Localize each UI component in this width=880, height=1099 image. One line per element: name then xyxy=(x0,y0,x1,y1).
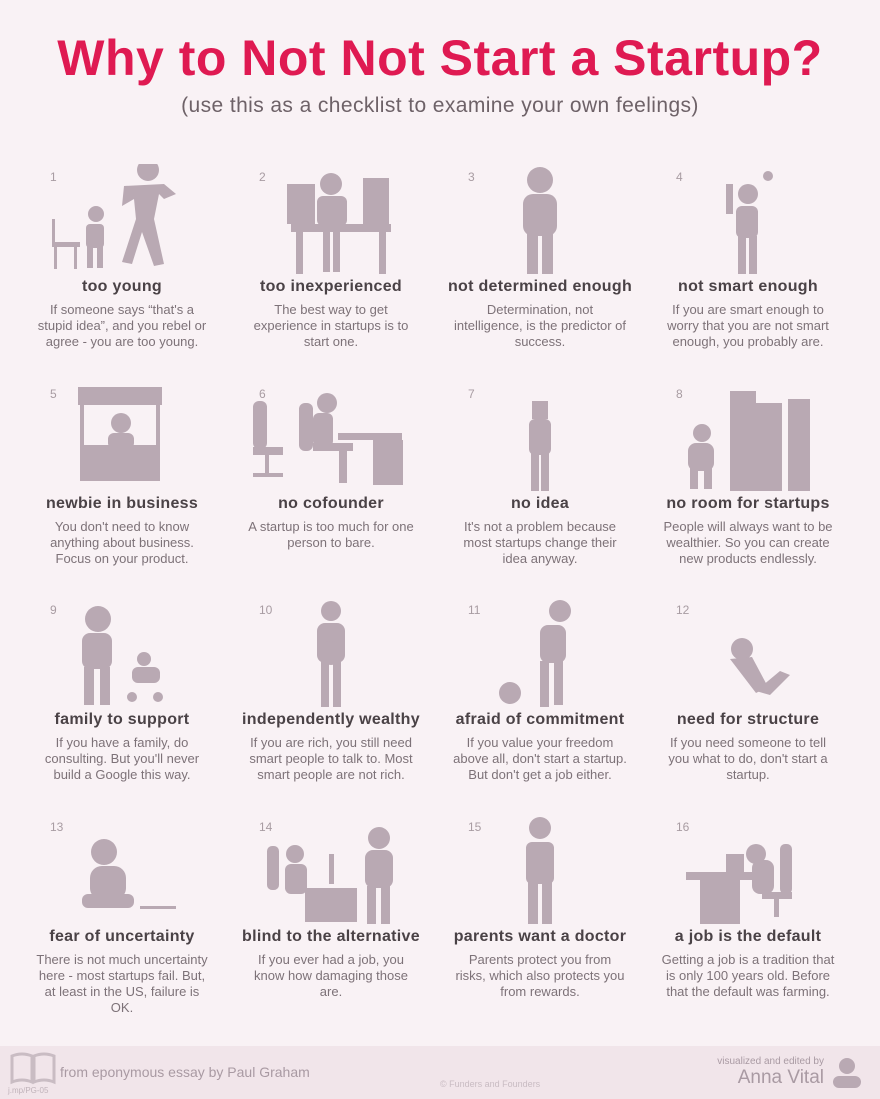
icon: sitting hunched person xyxy=(82,839,176,909)
subtitle: (use this as a checklist to examine your own feelings) xyxy=(181,94,699,117)
text: If you ever had a job, you know how damaging those are. xyxy=(254,952,408,999)
heading: parents want a doctor xyxy=(454,928,626,945)
text: If you are smart enough to worry that you are not smart enough, you probably are. xyxy=(667,302,829,349)
card 15: 15 xyxy=(468,820,481,834)
icon: person at desk, empty chair xyxy=(253,393,403,485)
card 11: 11 xyxy=(468,603,480,617)
credit: Anna Vital xyxy=(738,1067,824,1088)
heading: independently wealthy xyxy=(242,711,420,728)
text: If you are rich, you still need smart people to talk to. Most smart people are not rich. xyxy=(249,735,413,782)
heading: blind to the alternative xyxy=(242,928,420,945)
card 6 xyxy=(248,387,414,550)
heading: not smart enough xyxy=(678,278,818,295)
card 3: 3 xyxy=(468,170,475,184)
card 5: 5 xyxy=(50,387,57,401)
text: People will always want to be wealthier. So you can create new products endlessly. xyxy=(663,519,833,566)
card 15 xyxy=(454,817,626,999)
credit: visualized and edited by xyxy=(717,1056,824,1067)
copyright: © Funders and Founders xyxy=(440,1079,540,1089)
icon: standing person xyxy=(523,167,557,274)
heading: family to support xyxy=(55,711,189,728)
icon: adult and child xyxy=(52,164,176,269)
icon: author xyxy=(833,1058,861,1088)
card 13: 13 xyxy=(50,820,63,834)
card 12 xyxy=(668,603,828,782)
icon: person slumped at desk xyxy=(686,844,792,924)
card 3 xyxy=(448,167,632,349)
icon: thinking person xyxy=(726,171,773,274)
card 14: 14 xyxy=(259,820,272,834)
text: You don't need to know anything about business. Focus on your product. xyxy=(50,519,194,566)
title: Why to Not Not Start a Startup? xyxy=(57,30,823,86)
icon: person with ball and chain xyxy=(499,600,571,707)
icon: person with money bag xyxy=(317,601,345,707)
card 16: 16 xyxy=(676,820,689,834)
card 11 xyxy=(453,600,627,782)
source text: from eponymous essay by Paul Graham xyxy=(60,1064,310,1080)
card 7 xyxy=(463,387,617,566)
link: j.mp/PG-05 xyxy=(8,1086,48,1095)
heading: afraid of commitment xyxy=(456,711,624,728)
heading: no idea xyxy=(511,495,569,512)
card 1 xyxy=(38,164,206,349)
card 5 xyxy=(46,387,198,566)
text: If you need someone to tell you what to do, don't start a startup. xyxy=(668,735,828,782)
card 4: 4 xyxy=(676,170,683,184)
card 4 xyxy=(667,170,829,349)
icon: worker and boss xyxy=(267,827,393,924)
heading: too young xyxy=(82,278,162,295)
credit xyxy=(717,1056,824,1088)
card 10: 10 xyxy=(259,603,272,617)
card 13 xyxy=(36,820,208,1015)
card 12: 12 xyxy=(676,603,689,617)
icon: person with bucket head xyxy=(529,401,551,491)
text: A startup is too much for one person to bare. xyxy=(248,519,414,550)
card 8 xyxy=(663,387,833,566)
icon: person with stroller xyxy=(82,606,163,705)
heading: a job is the default xyxy=(675,928,821,945)
icon: doctor xyxy=(526,817,554,924)
card 2 xyxy=(254,170,408,349)
card 8: 8 xyxy=(676,387,683,401)
card 9: 9 xyxy=(50,603,57,617)
icon: person doing sit-up xyxy=(730,638,790,695)
icon: book xyxy=(10,1052,56,1084)
card 1: 1 xyxy=(50,170,57,184)
card 7: 7 xyxy=(468,387,475,401)
card 6: 6 xyxy=(259,387,266,401)
icon: market stall xyxy=(78,387,162,481)
heading: no room for startups xyxy=(666,495,830,512)
footer xyxy=(0,1046,880,1099)
card 10 xyxy=(242,601,420,782)
text: There is not much uncertainty here - most startups fail. But, at least in the US, failure is OK. xyxy=(36,952,208,1015)
text: Getting a job is a tradition that is only 100 years old. Before that the default was farming. xyxy=(662,952,834,999)
icon: person and skyscrapers xyxy=(688,391,810,491)
heading: need for structure xyxy=(677,711,819,728)
heading: not determined enough xyxy=(448,278,632,295)
text: Determination, not intelligence, is the predictor of success. xyxy=(454,302,626,349)
heading: newbie in business xyxy=(46,495,198,512)
text: If you value your freedom above all, don't start a startup. But don't get a job either. xyxy=(453,735,627,782)
text: If you have a family, do consulting. But you'll never build a Google this way. xyxy=(45,735,199,782)
text: It's not a problem because most startups change their idea anyway. xyxy=(463,519,617,566)
card 9 xyxy=(45,603,199,782)
card 14 xyxy=(242,820,420,999)
heading: too inexperienced xyxy=(260,278,402,295)
text: If someone says “that's a stupid idea”, and you rebel or agree - you are too young. xyxy=(38,302,206,349)
heading: fear of uncertainty xyxy=(49,928,195,945)
card 16 xyxy=(662,820,834,999)
card 2: 2 xyxy=(259,170,266,184)
heading: no cofounder xyxy=(278,495,384,512)
text: The best way to get experience in startups is to start one. xyxy=(254,302,408,349)
text: Parents protect you from risks, which also protects you from rewards. xyxy=(455,952,625,999)
icon: person at desk with books xyxy=(287,173,391,274)
